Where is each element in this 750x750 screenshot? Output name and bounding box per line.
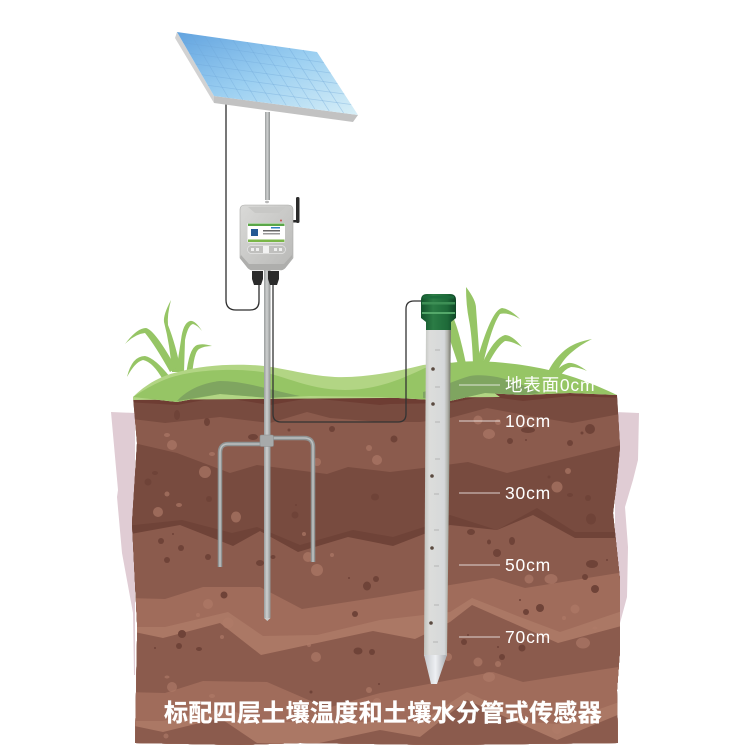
depth label: 70cm (459, 627, 551, 647)
fork clamp (260, 435, 274, 446)
soil layer 4 (132, 515, 619, 622)
fork probe (220, 435, 313, 567)
soil layer 10 (135, 700, 618, 745)
depth label: 50cm (459, 555, 551, 575)
background pink soil shadow (111, 412, 639, 675)
green cap (421, 294, 456, 330)
small mount under upper pole (265, 201, 269, 203)
depth label: 70cm: 70cm (505, 627, 551, 647)
tube sensor holes (429, 367, 435, 625)
dark soil stones (144, 410, 608, 694)
soil layer 1 (132, 396, 620, 695)
soil tube sensor (421, 294, 456, 684)
title: 标配四层土壤温度和土壤水分管式传感器 (164, 699, 602, 727)
depth label: 50cm: 50cm (505, 555, 551, 575)
left grass clump (125, 300, 212, 380)
light soil stones (153, 416, 598, 738)
depth label: 10cm (459, 411, 551, 431)
panel: soil cross-section (132, 393, 620, 745)
controller box (240, 205, 293, 270)
depth label: 30cm (459, 483, 551, 503)
right grass clump (450, 287, 592, 376)
grass surface (133, 361, 617, 402)
depth label: surface 0cm (459, 375, 595, 395)
depth label: surface 0cm: 地表面0cm (505, 375, 595, 395)
soil layer 7 (136, 605, 620, 708)
pole: upper pole (265, 112, 270, 200)
tube tip (424, 655, 447, 684)
tube scale ticks (433, 350, 440, 642)
antenna (291, 197, 300, 223)
wire: sensor tube to controller (273, 283, 421, 422)
soil layer 3 dark strip (132, 508, 620, 720)
cable glands (252, 271, 279, 285)
pole: main lower pole (264, 270, 270, 621)
wire: solar panel to controller (226, 104, 259, 310)
depth label: 10cm: 10cm (505, 411, 551, 431)
depth label: 30cm: 30cm (505, 483, 551, 503)
solar panel (175, 32, 358, 122)
soil band 5 (136, 573, 620, 636)
soil layer 2 (132, 408, 620, 663)
soil band 8 (136, 667, 618, 724)
soil band 6 (137, 598, 620, 655)
soil layer 3 (132, 444, 620, 695)
controller logo strip (248, 246, 286, 254)
controller screen (248, 223, 285, 242)
tube body (424, 326, 451, 656)
soil band 9 (136, 692, 618, 744)
